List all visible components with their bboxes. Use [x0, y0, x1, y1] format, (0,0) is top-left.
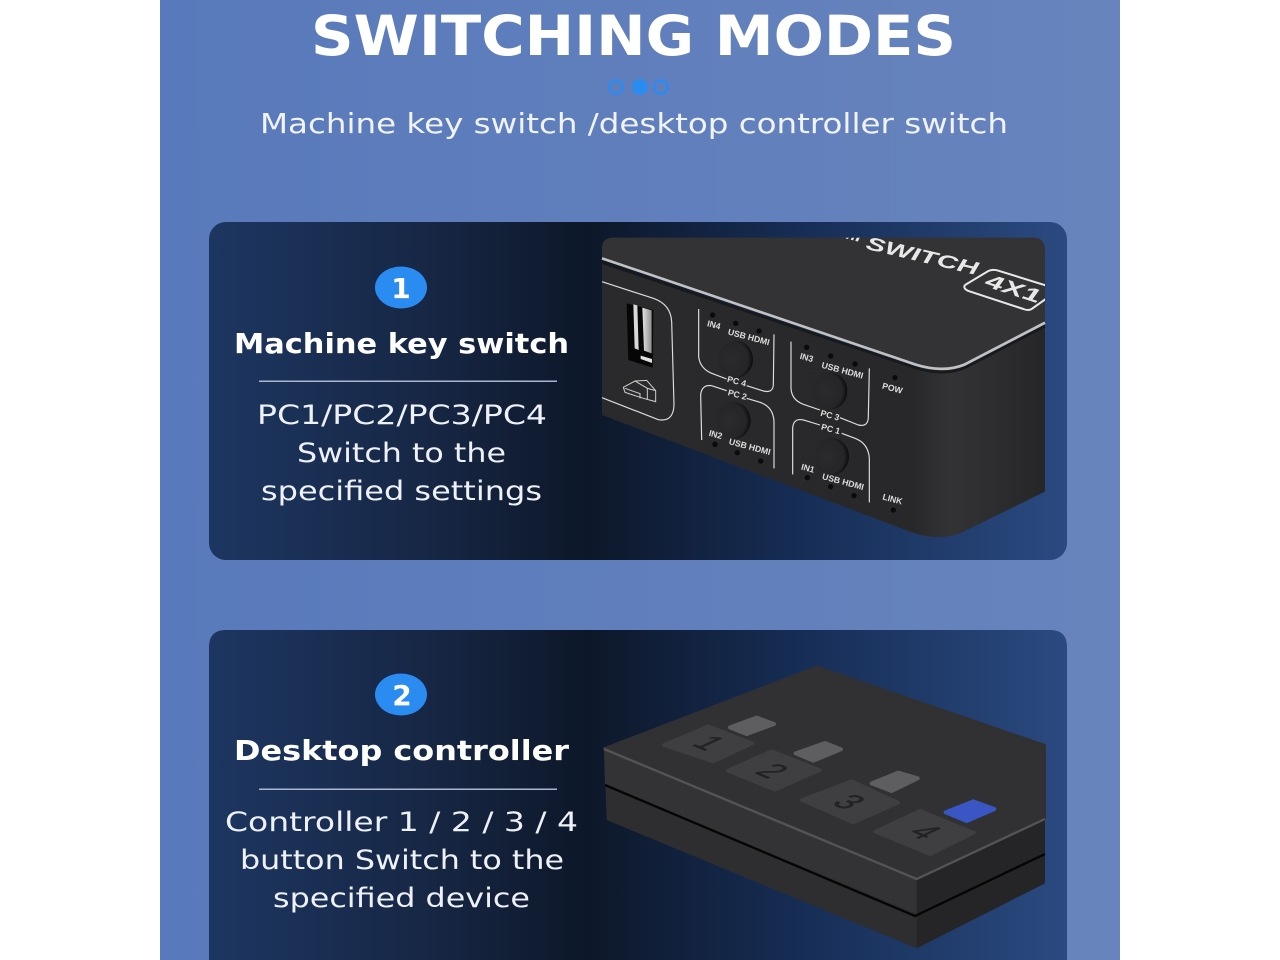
port labels: PC 4 [726, 374, 748, 389]
key 2: 2 [747, 759, 798, 783]
port labels: USB HDMI [821, 471, 865, 492]
USB port [602, 282, 674, 420]
panel: desktop controller [209, 630, 1067, 960]
key 1 [663, 726, 752, 762]
title: SWITCHING MODES [311, 4, 956, 68]
port labels: IN4 [706, 318, 722, 331]
page background [160, 0, 1120, 960]
description text [225, 807, 578, 914]
port labels: POW [881, 381, 905, 396]
key 4 [875, 811, 974, 854]
PC buttons [716, 341, 849, 475]
top face printed label [814, 214, 1047, 310]
controller top face [604, 667, 1045, 878]
key 3 [802, 781, 898, 823]
key 1: 1 [684, 731, 735, 755]
port labels: USB HDMI [820, 360, 864, 381]
description text: specified device [273, 883, 530, 914]
top face printed label: 4X1 [981, 270, 1043, 308]
port labels: LINK [881, 492, 904, 507]
number badge 1: 1 [391, 272, 411, 305]
port labels: USB HDMI [728, 436, 772, 457]
port labels: IN1 [800, 462, 816, 475]
button outlines [699, 309, 869, 502]
number badge 2 [375, 674, 427, 716]
key 4: 4 [900, 820, 951, 844]
pagination dots [610, 79, 668, 95]
infographic page [160, 0, 1120, 960]
device front face [602, 262, 1045, 537]
description text: PC1/PC2/PC3/PC4 [257, 400, 547, 431]
port labels: PC 1 [820, 422, 842, 436]
top face printed label: SWITCH [864, 232, 982, 279]
heading: desktop controller: Desktop controller [234, 734, 569, 767]
indicator LEDs [710, 312, 898, 513]
port labels: PC 3 [819, 408, 841, 423]
device top face [602, 238, 1045, 369]
top face printed label: HDMI [814, 214, 865, 246]
port labels [706, 318, 905, 507]
panel: machine key switch [209, 214, 1067, 560]
port labels: PC 2 [727, 387, 748, 402]
seam lines [605, 785, 1045, 916]
port labels: USB HDMI [727, 327, 771, 347]
subtitle: Machine key switch /desktop controller switch [260, 107, 1008, 140]
description text: Controller 1 / 2 / 3 / 4 [225, 807, 578, 838]
number badge 1 [375, 266, 427, 308]
device: desktop controller [604, 667, 1045, 948]
description text: specified settings [261, 476, 542, 507]
controller right side [917, 818, 1045, 948]
description text: button Switch to the [240, 845, 564, 876]
description text [257, 400, 547, 507]
controller left side [604, 748, 917, 948]
description text: Switch to the [297, 438, 506, 469]
port labels: IN2 [708, 428, 724, 441]
key 3: 3 [824, 790, 875, 814]
number badge 2: 2 [392, 679, 412, 712]
port labels: IN3 [799, 351, 815, 364]
device: KVM switch 4x1 [602, 214, 1047, 537]
key 2 [727, 751, 820, 790]
heading: machine key switch: Machine key switch [234, 327, 569, 360]
status lights [730, 718, 994, 821]
